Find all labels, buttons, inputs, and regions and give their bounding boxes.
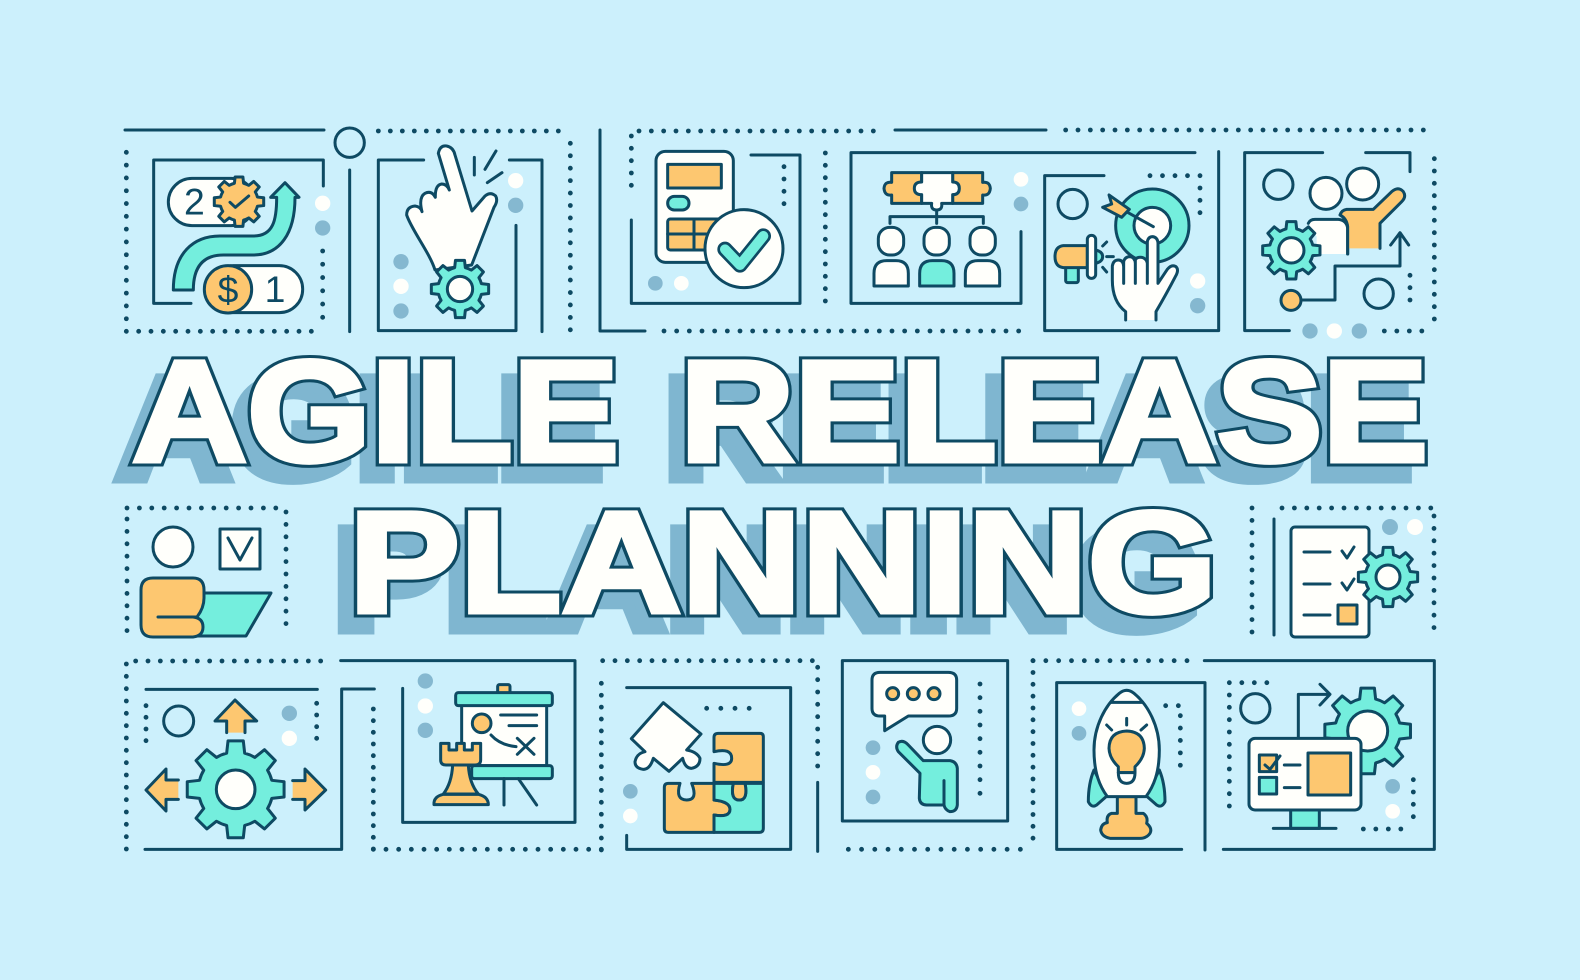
icon: tapping hand bbox=[1112, 237, 1178, 320]
icon: two people bbox=[1308, 168, 1405, 254]
panel: team puzzle hierarchy bbox=[851, 153, 1195, 303]
arrow: left bbox=[146, 769, 178, 811]
icon: pill with number 2 bbox=[168, 177, 264, 226]
panel: chess strategy board bbox=[341, 661, 603, 849]
icon: pill with number 2: 2 bbox=[184, 180, 205, 222]
icon: assembled pieces bbox=[664, 733, 763, 832]
panel: speaking person bbox=[842, 661, 1021, 849]
icon: monitor bbox=[1249, 738, 1361, 828]
panel: puzzle pieces bbox=[601, 661, 818, 851]
title: PLANNING bbox=[333, 499, 1201, 660]
icon: orange node bbox=[1281, 290, 1301, 310]
title: AGILE bbox=[132, 331, 619, 492]
icon: teal gear bbox=[431, 260, 489, 318]
panel: calculator with check bbox=[600, 130, 1046, 331]
title: PLANNING bbox=[349, 482, 1217, 643]
icon: calculator bbox=[656, 151, 733, 262]
icon: teal gear bbox=[1263, 222, 1320, 279]
icon: head bbox=[153, 527, 193, 567]
icon: rocket bbox=[1088, 690, 1165, 838]
icon: target with arrow bbox=[1103, 189, 1189, 262]
icon: puzzle bar bbox=[884, 173, 990, 210]
icon: pill with dollar coin and number 1: 1 bbox=[265, 268, 285, 310]
title: AGILE bbox=[132, 331, 619, 492]
title: PLANNING bbox=[349, 482, 1217, 643]
icon: laptop bbox=[190, 593, 271, 636]
title: AGILE bbox=[116, 348, 603, 509]
arrow: up and right bbox=[1298, 684, 1330, 738]
panel: prioritised roadmap steps bbox=[125, 130, 330, 331]
arrow: stepped path bbox=[1300, 233, 1409, 300]
icon: chess rook bbox=[434, 743, 488, 805]
title bbox=[116, 331, 1428, 660]
icon: large teal gear bbox=[1325, 688, 1410, 774]
icon: megaphone bbox=[1055, 235, 1113, 283]
icon: rising arrow bbox=[173, 183, 299, 290]
icon: speech bubble bbox=[872, 672, 957, 731]
icon: connector lines bbox=[890, 210, 983, 223]
icon: checkbox bbox=[220, 529, 260, 569]
title: RELEASE bbox=[680, 331, 1428, 492]
icon: pill with dollar coin and number 1: $ bbox=[218, 268, 239, 310]
icon: loose white piece bbox=[631, 703, 701, 771]
panel: team growth path bbox=[1066, 130, 1435, 339]
icon: click rays bbox=[474, 151, 502, 183]
icon: presenter bbox=[897, 726, 957, 812]
panel: target and promotion bbox=[1045, 152, 1219, 331]
arrow: up bbox=[215, 700, 257, 733]
icon: check badge bbox=[705, 210, 783, 288]
panel: person at laptop bbox=[127, 508, 286, 637]
icon: large teal gear bbox=[187, 741, 284, 838]
icon: presentation board bbox=[456, 685, 552, 805]
title: RELEASE bbox=[664, 348, 1412, 509]
panel: rocket with light bulb bbox=[1033, 661, 1205, 850]
icon: pointing hand bbox=[407, 146, 497, 270]
icon: pill with dollar coin and number 1 bbox=[204, 266, 303, 313]
title: RELEASE bbox=[680, 331, 1428, 492]
icon: teal gear bbox=[1358, 547, 1418, 607]
panel: checklist with gear bbox=[1252, 508, 1434, 637]
panel: click and configure bbox=[335, 128, 570, 332]
icon: three people bbox=[874, 227, 1000, 286]
icon: light bulb bbox=[1107, 718, 1147, 783]
panel: gear with directional arrows bbox=[126, 661, 374, 850]
panel: monitor and gear bbox=[1204, 661, 1434, 849]
icon: seated body bbox=[141, 578, 204, 637]
arrow: right bbox=[293, 769, 326, 810]
icon: checklist document bbox=[1291, 527, 1369, 637]
